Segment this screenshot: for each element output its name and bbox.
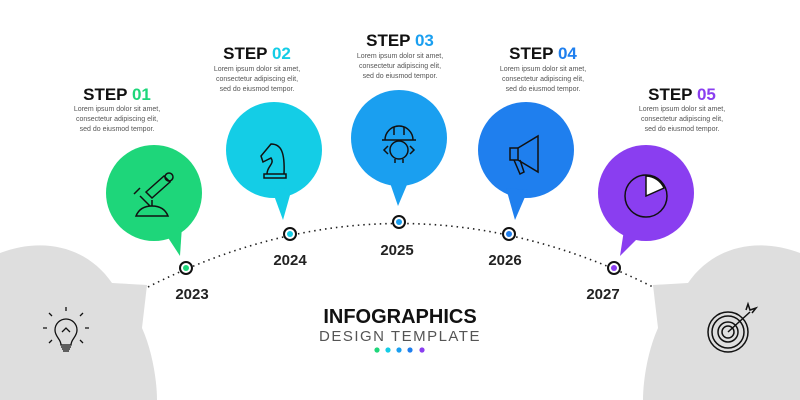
years: 2023 <box>175 286 209 303</box>
bubble: step 1 <box>106 145 202 256</box>
years: 2027 <box>586 286 620 303</box>
title: INFOGRAPHICS <box>323 306 477 328</box>
timeline dots <box>180 216 620 274</box>
right gray shape <box>643 245 800 400</box>
step texts: STEP 01 <box>83 85 151 104</box>
step texts: sed do eiusmod tempor. <box>220 86 294 93</box>
icon: lightbulb <box>43 307 89 351</box>
step texts: Lorem ipsum dolor sit amet, <box>500 66 586 73</box>
years: 2026 <box>488 252 522 269</box>
step texts: consectetur adipiscing elit, <box>641 116 723 123</box>
step texts: STEP 04 <box>509 44 577 63</box>
step texts <box>74 31 725 133</box>
bubble: step 3 <box>351 90 447 206</box>
title: DESIGN TEMPLATE <box>319 328 481 345</box>
step texts: Lorem ipsum dolor sit amet, <box>357 53 443 60</box>
step texts: Lorem ipsum dolor sit amet, <box>639 106 725 113</box>
step texts: STEP 03 <box>366 31 434 50</box>
step texts: consectetur adipiscing elit, <box>502 76 584 83</box>
years: 2024 <box>273 252 307 269</box>
title <box>319 306 481 353</box>
step texts: sed do eiusmod tempor. <box>363 73 437 80</box>
step texts: STEP 05 <box>648 85 716 104</box>
dotted timeline arc <box>148 224 653 287</box>
step texts: Lorem ipsum dolor sit amet, <box>74 106 160 113</box>
icon: microscope <box>134 173 173 216</box>
left gray shape <box>0 245 157 400</box>
step texts: consectetur adipiscing elit, <box>216 76 298 83</box>
years: 2025 <box>380 242 414 259</box>
icon: megaphone <box>510 136 538 174</box>
step texts: Lorem ipsum dolor sit amet, <box>214 66 300 73</box>
icon: target <box>708 304 756 352</box>
step texts: sed do eiusmod tempor. <box>80 126 154 133</box>
icon: helmet gear <box>382 126 416 163</box>
icon: clock <box>625 175 667 217</box>
step texts: sed do eiusmod tempor. <box>645 126 719 133</box>
step texts: consectetur adipiscing elit, <box>76 116 158 123</box>
bubble: step 4 <box>478 102 574 220</box>
icon: chess knight <box>261 144 286 178</box>
bubble: step 5 <box>598 145 694 256</box>
step texts: consectetur adipiscing elit, <box>359 63 441 70</box>
step texts: sed do eiusmod tempor. <box>506 86 580 93</box>
years <box>175 242 620 303</box>
bubble: step 2 <box>226 102 322 220</box>
step texts: STEP 02 <box>223 44 291 63</box>
